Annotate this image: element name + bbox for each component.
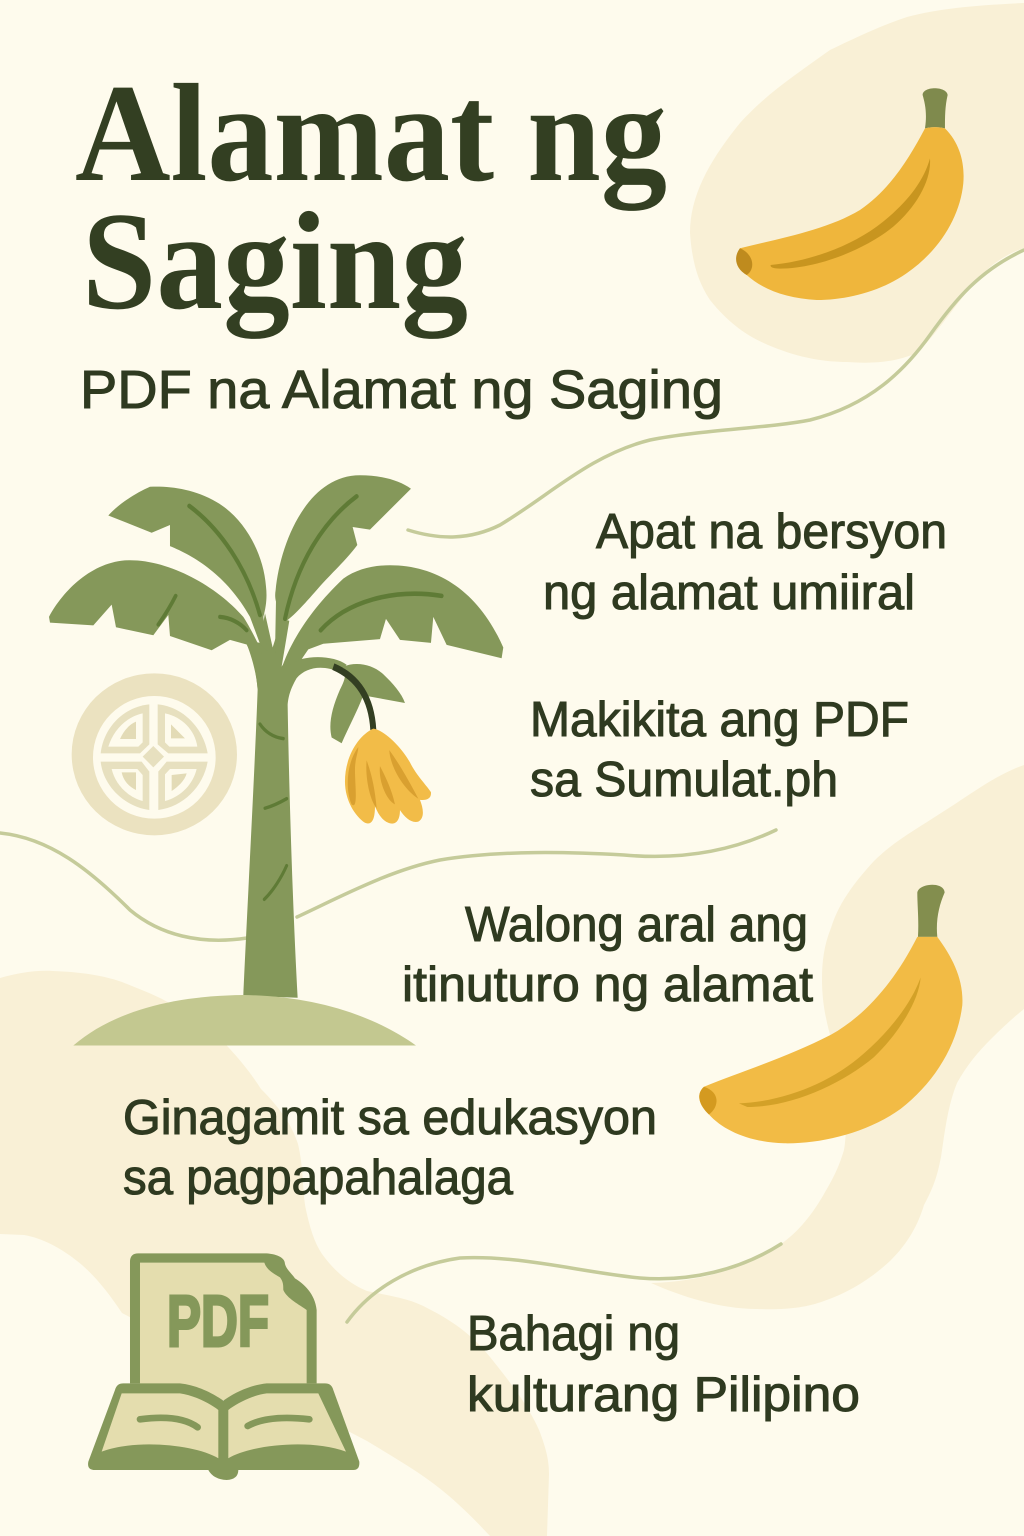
leaf: far left <box>49 560 262 690</box>
small leaf by the banana bunch <box>330 664 405 743</box>
text: where to find the PDF: Makikita ang PDF <box>530 693 909 747</box>
banana bunch <box>345 729 431 824</box>
text: used in values education: Ginagamit sa edukasyon <box>123 1091 657 1145</box>
text: part of Filipino culture: kulturang Pilipino <box>467 1368 860 1422</box>
background blob: top right <box>690 3 1024 363</box>
illustration: banana tree <box>49 475 503 1046</box>
leaf: center right <box>275 475 411 655</box>
leaf: far right <box>282 565 503 669</box>
banana bunch stem <box>333 667 373 730</box>
title <box>75 56 667 339</box>
open book <box>88 1383 359 1480</box>
text: where to find the PDF: sa Sumulat.ph <box>530 753 838 807</box>
icon: banana lower right <box>699 885 962 1143</box>
text: four versions: Apat na bersyon <box>596 505 947 559</box>
text: eight lessons <box>402 898 813 1012</box>
background blob: lower right <box>651 765 1024 1309</box>
icon: banana top right <box>736 88 964 300</box>
curved line: top <box>408 250 1024 537</box>
text: part of Filipino culture <box>467 1307 860 1422</box>
tree trunk and stems <box>243 613 347 998</box>
title: Alamat ng <box>75 56 667 211</box>
curved line: middle <box>0 830 776 940</box>
leaf: center left <box>108 487 267 651</box>
text: used in values education <box>123 1091 657 1205</box>
grassy mound <box>73 995 416 1046</box>
document page <box>130 1253 317 1400</box>
text: four versions <box>543 505 947 620</box>
title: Saging <box>82 184 468 339</box>
curved line: bottom <box>347 1244 781 1322</box>
background blob: lower left <box>0 971 549 1536</box>
PDF label: PDF <box>167 1282 269 1362</box>
text: where to find the PDF <box>530 693 909 807</box>
icon: PDF document on an open book <box>88 1253 359 1480</box>
icon: cultural emblem <box>72 673 237 835</box>
leaf veins and bark marks <box>158 496 442 899</box>
text: eight lessons: itinuturo ng alamat <box>402 958 813 1012</box>
text: used in values education: sa pagpapahalaga <box>123 1151 514 1205</box>
subtitle: PDF na Alamat ng Saging <box>80 360 723 420</box>
text: part of Filipino culture: Bahagi ng <box>467 1307 680 1361</box>
text: eight lessons: Walong aral ang <box>465 898 808 952</box>
text: four versions: ng alamat umiiral <box>543 566 915 620</box>
